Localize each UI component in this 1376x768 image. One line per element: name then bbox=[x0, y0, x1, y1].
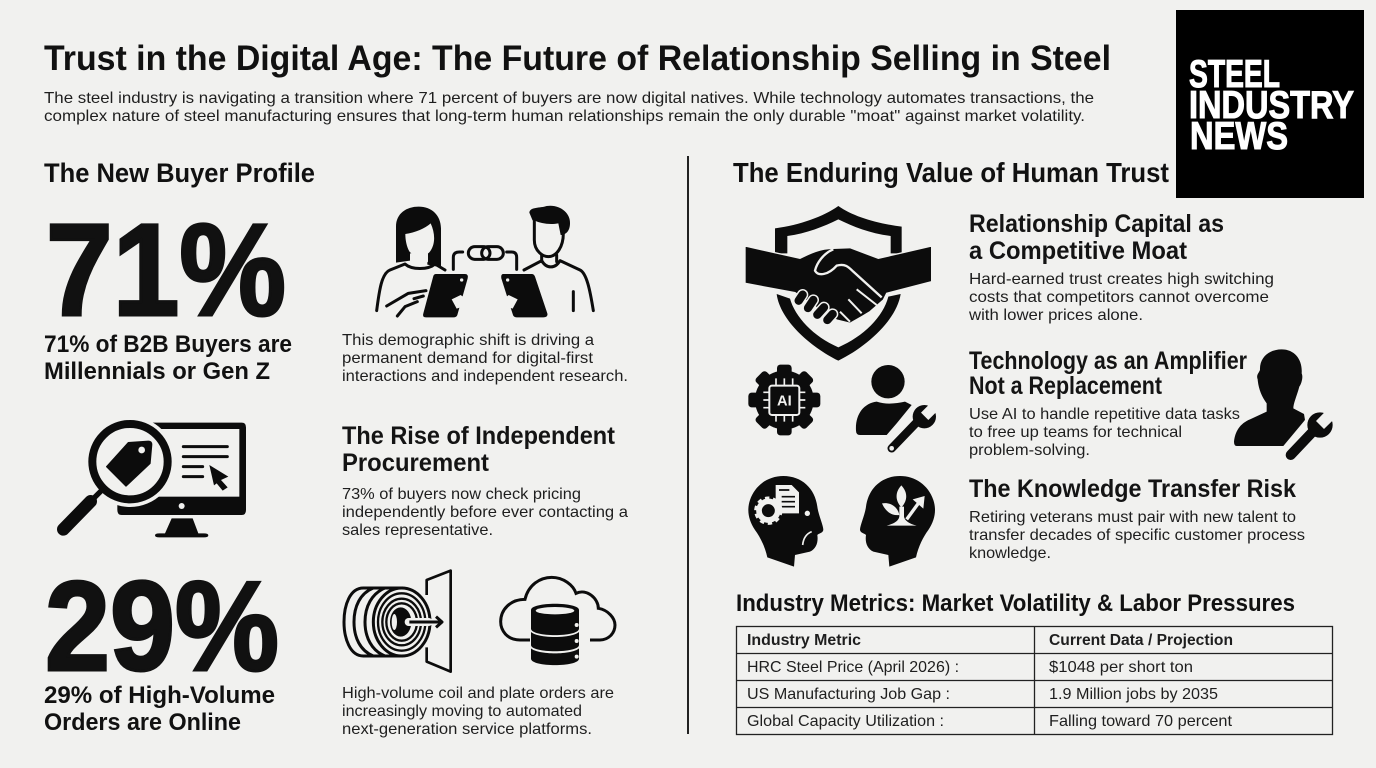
logo: Steel Industry News: NEWS bbox=[1190, 115, 1288, 158]
block: relationship capital: a Competitive Moat bbox=[969, 237, 1188, 265]
description: high-volume orders: next-generation service platforms. bbox=[342, 721, 592, 738]
heading: enduring value: The Enduring Value of Human Trust bbox=[733, 157, 1169, 188]
block: rise of independent procurement bbox=[342, 422, 628, 539]
table: industry metrics: $1048 per short ton bbox=[1049, 659, 1193, 676]
table: industry metrics: Current Data / Projection bbox=[1049, 632, 1233, 649]
heading: new buyer profile: The New Buyer Profile bbox=[44, 158, 315, 188]
description: high-volume orders bbox=[342, 685, 614, 738]
table: industry metrics: Falling toward 70 percent bbox=[1049, 713, 1233, 730]
block: knowledge transfer risk: The Knowledge Transfer Risk bbox=[969, 475, 1296, 503]
block: rise of independent procurement: The Rise of Independent bbox=[342, 422, 616, 450]
block: rise of independent procurement: independently before ever contacting a bbox=[342, 504, 628, 521]
block: technology as an amplifier: Not a Replacement bbox=[969, 372, 1163, 400]
icon: magnifier over price tag and monitor bbox=[63, 416, 246, 537]
intro text bbox=[44, 90, 1094, 125]
description: demographic shift: permanent demand for digital-first bbox=[342, 350, 594, 367]
block: technology as an amplifier: Use AI to handle repetitive data tasks bbox=[969, 406, 1240, 423]
table: industry metrics: US Manufacturing Job Gap : bbox=[747, 686, 950, 703]
description: demographic shift: interactions and independent research. bbox=[342, 368, 628, 385]
icon: head with gear and document bbox=[748, 476, 823, 567]
stat caption: 29%: Orders are Online bbox=[44, 709, 241, 736]
big stat: 29%: 29% bbox=[45, 555, 279, 697]
intro text: The steel industry is navigating a transition where 71 percent of buyers are now digital natives. While technology automates transactions, the bbox=[44, 90, 1094, 107]
panel: the new buyer profile bbox=[44, 158, 628, 738]
block: relationship capital: costs that competitors cannot overcome bbox=[969, 289, 1269, 306]
block: rise of independent procurement: 73% of buyers now check pricing bbox=[342, 486, 581, 503]
stat caption: 71%: Millennials or Gen Z bbox=[44, 358, 270, 385]
block: relationship capital bbox=[968, 210, 1274, 324]
table: industry metrics: Global Capacity Utilization : bbox=[747, 713, 944, 730]
stat caption: 71%: 71% of B2B Buyers are bbox=[44, 331, 292, 358]
description: high-volume orders: increasingly moving to automated bbox=[342, 703, 582, 720]
icon: AI chip in gear bbox=[748, 365, 820, 435]
table: industry metrics: 1.9 Million jobs by 2035 bbox=[1049, 686, 1218, 703]
block: relationship capital: Relationship Capital as bbox=[969, 210, 1224, 238]
block: technology as an amplifier: Technology as an Amplifier bbox=[969, 347, 1247, 375]
block: knowledge transfer risk bbox=[969, 475, 1305, 562]
block: rise of independent procurement: sales representative. bbox=[342, 522, 493, 539]
block: relationship capital: Hard-earned trust creates high switching bbox=[969, 271, 1274, 288]
block: rise of independent procurement: Procurement bbox=[342, 449, 490, 477]
block: relationship capital: with lower prices alone. bbox=[968, 307, 1143, 324]
title: Trust in the Digital Age: The Future of Relationship Selling in Steel bbox=[44, 38, 1111, 78]
stat caption: 29% bbox=[44, 682, 275, 736]
stat caption: 71% bbox=[44, 331, 292, 385]
icon: silhouette with wrench bbox=[1234, 349, 1337, 455]
description: demographic shift bbox=[342, 332, 628, 385]
intro text: complex nature of steel manufacturing ensures that long-term human relationships remain the only durable "moat" against market volatility. bbox=[44, 108, 1085, 125]
big stat: 71%: 71% bbox=[46, 196, 286, 343]
heading: industry metrics: Industry Metrics: Market Volatility & Labor Pressures bbox=[736, 590, 1295, 617]
icon: head with growing plant bbox=[860, 476, 935, 567]
block: technology as an amplifier bbox=[969, 347, 1247, 459]
logo: Steel Industry News: STEEL bbox=[1189, 53, 1280, 96]
table: industry metrics: Industry Metric bbox=[747, 632, 861, 649]
block: knowledge transfer risk: Retiring veterans must pair with new talent to bbox=[969, 509, 1296, 526]
icon: AI chip in gear: AI bbox=[777, 393, 792, 409]
icon: person with wrench bbox=[856, 365, 940, 451]
table: industry metrics bbox=[736, 626, 1333, 734]
panel: the enduring value of human trust bbox=[733, 157, 1337, 734]
icon: two buyers with linked tablets bbox=[377, 206, 593, 317]
block: technology as an amplifier: problem-solving. bbox=[969, 442, 1090, 459]
block: technology as an amplifier: to free up teams for technical bbox=[969, 424, 1182, 441]
block: knowledge transfer risk: transfer decades of specific customer process bbox=[969, 527, 1305, 544]
logo: Steel Industry News bbox=[1176, 10, 1364, 198]
description: demographic shift: This demographic shift is driving a bbox=[342, 332, 594, 349]
stat caption: 29%: 29% of High-Volume bbox=[44, 682, 275, 709]
icon: cloud database bbox=[501, 577, 615, 665]
block: knowledge transfer risk: knowledge. bbox=[969, 545, 1051, 562]
table: industry metrics: HRC Steel Price (April 2026) : bbox=[747, 659, 959, 676]
icon: steel coil moving through door bbox=[344, 571, 451, 672]
description: high-volume orders: High-volume coil and plate orders are bbox=[342, 685, 614, 702]
icon: handshake over shield bbox=[745, 206, 932, 361]
